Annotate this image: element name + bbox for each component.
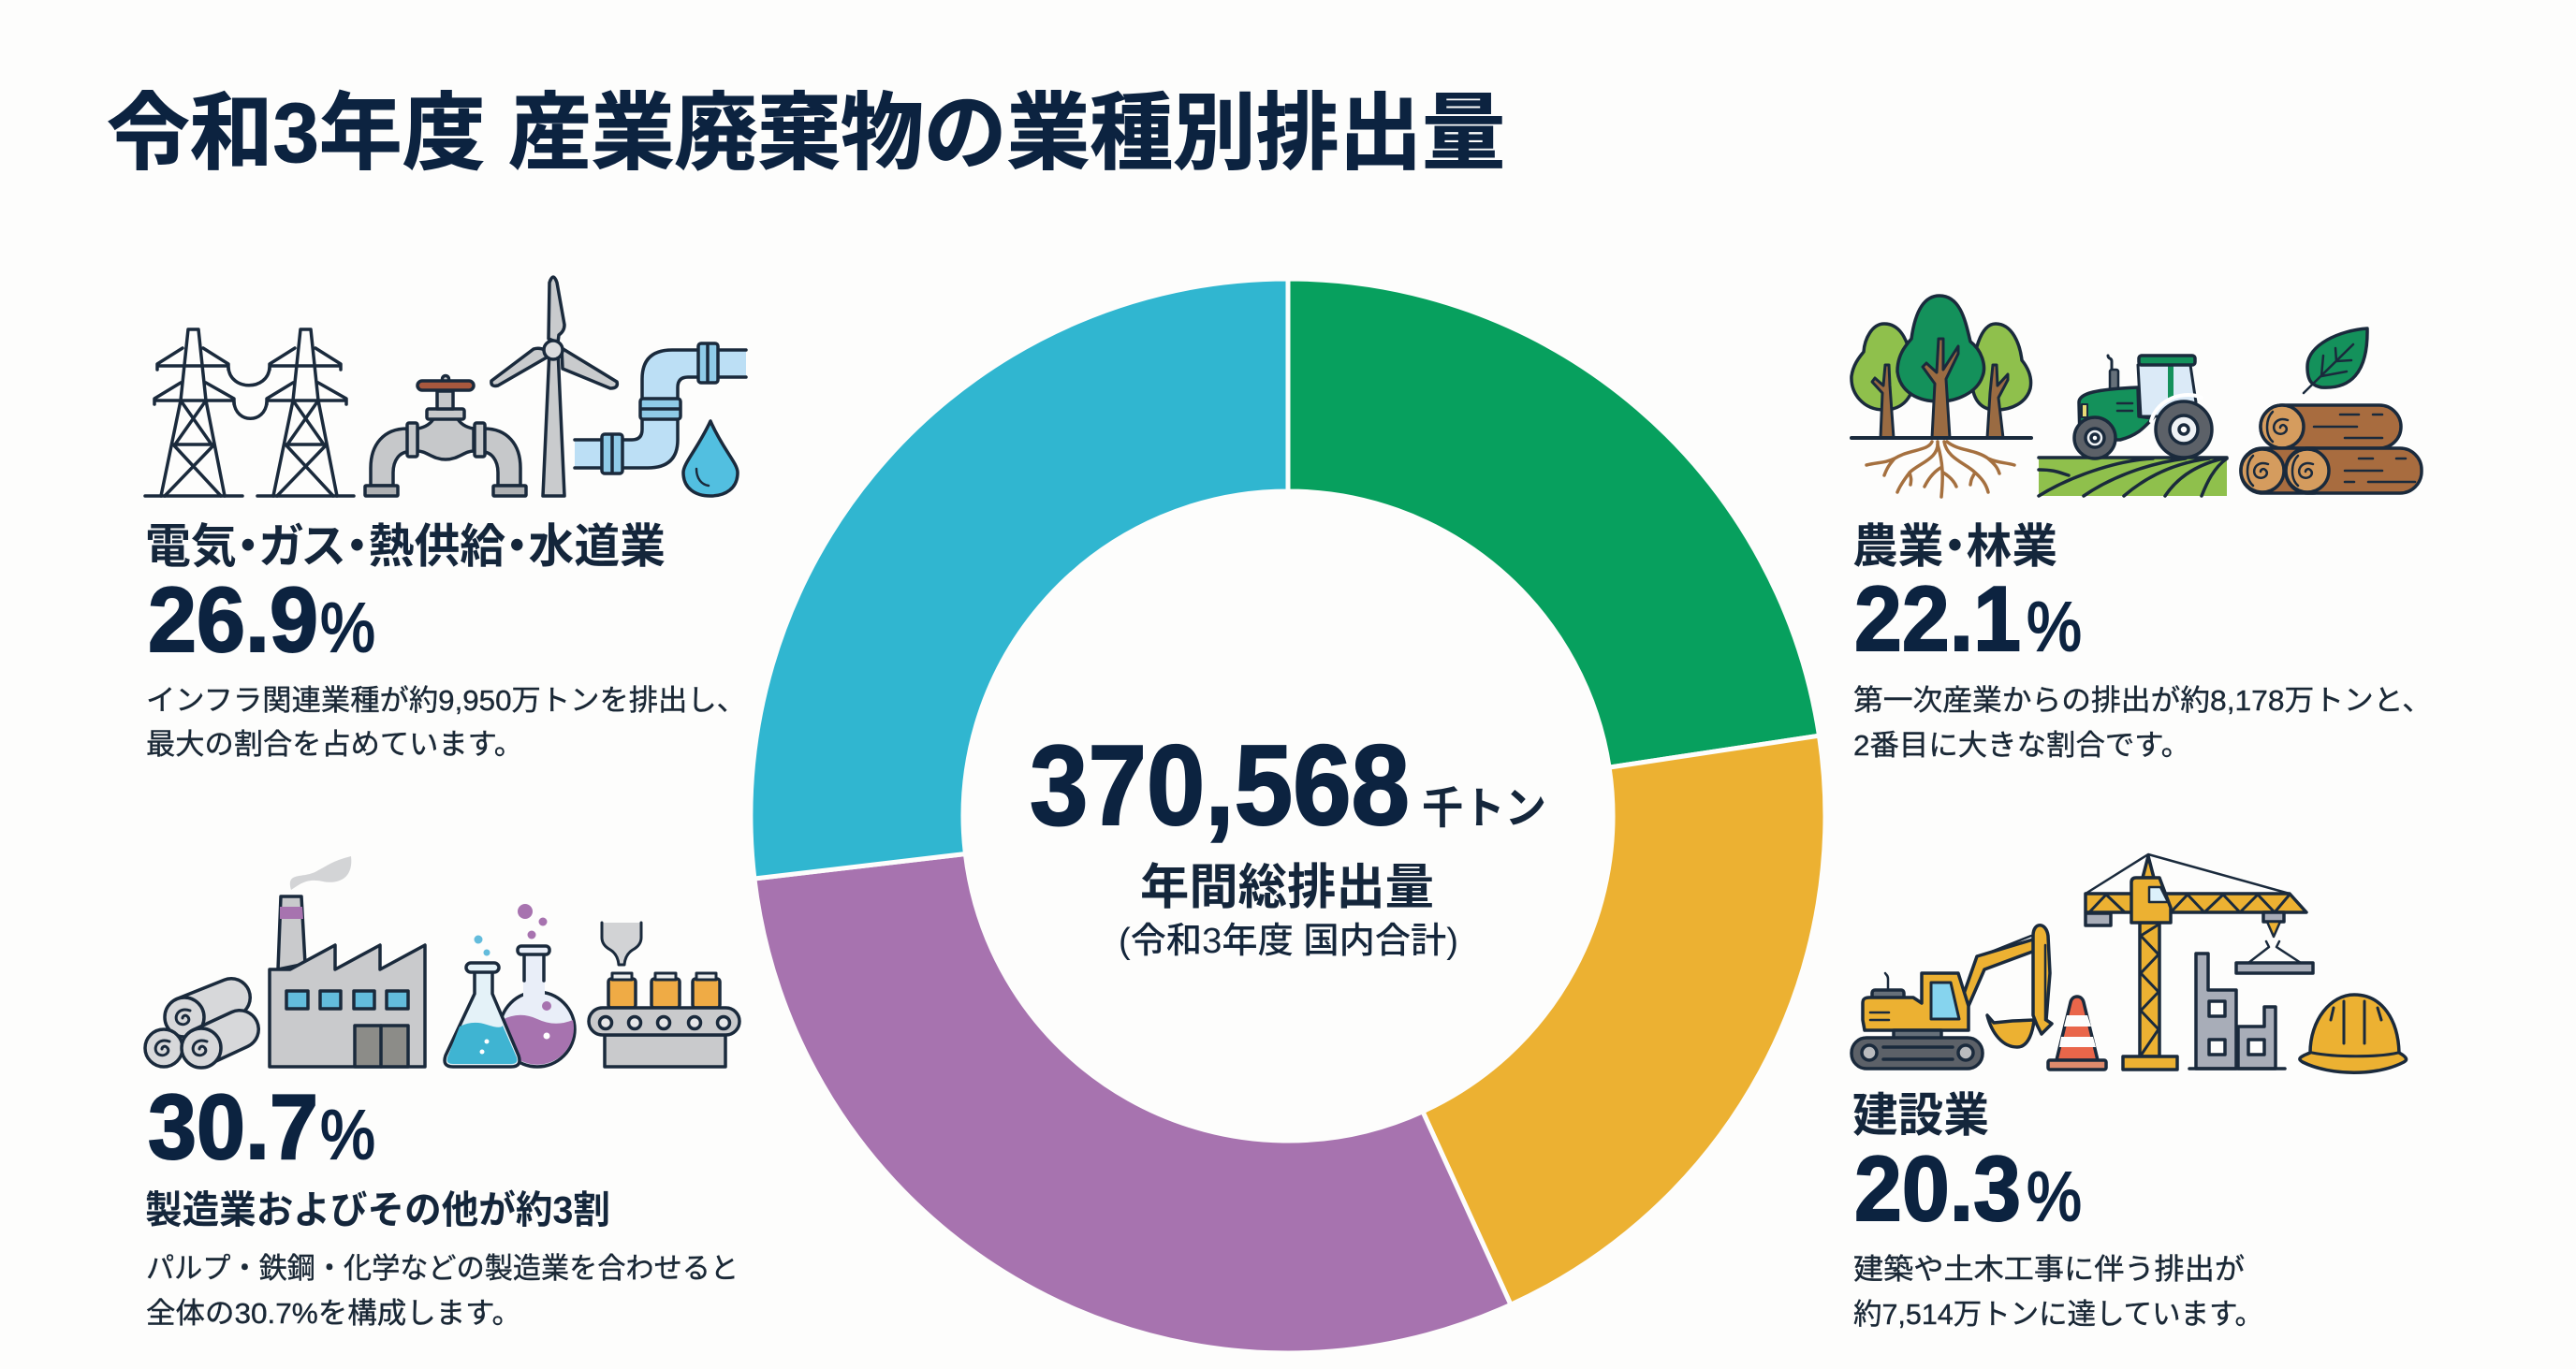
centre note: (令和3年度 国内合計) [1119, 922, 1458, 961]
icon: logs and leaf [2241, 328, 2422, 493]
description: 建築や土木工事に伴う排出が [1853, 1253, 2245, 1286]
icon: conveyor line [589, 923, 739, 1067]
icon: excavator [1852, 925, 2052, 1069]
title: 令和3年度 産業廃棄物の業種別排出量 [107, 87, 1505, 181]
description [146, 1252, 739, 1330]
segment: agriculture and forestry 22.1% [1288, 279, 1820, 767]
icon: hard hat [2300, 995, 2407, 1072]
icon: paper rolls [145, 998, 240, 1068]
icon: traffic cone [2048, 997, 2106, 1070]
heading: 建設業 [1852, 1089, 1989, 1142]
icon: water pipe [575, 343, 746, 473]
percentage: % [2027, 588, 2082, 665]
description [1853, 1253, 2263, 1331]
icon: utilities illustration [145, 277, 746, 496]
description: 最大の割合を占めています。 [146, 728, 523, 761]
heading: 製造業およびその他が約3割 [145, 1188, 610, 1231]
panel: construction [1852, 854, 2407, 1331]
panel: agriculture and forestry [1852, 296, 2432, 762]
icon: tower crane [2086, 854, 2313, 1070]
unit: 千トン [1422, 783, 1546, 833]
donut centre label [1030, 721, 1546, 961]
icon: manufacturing illustration [145, 856, 739, 1068]
icon: agriculture illustration [1852, 296, 2422, 497]
icon: trees [1852, 296, 2031, 497]
description: 2番目に大きな割合です。 [1853, 729, 2190, 762]
percentage: % [320, 1096, 375, 1173]
percentage: 30.7 [148, 1075, 318, 1178]
segment: manufacturing 30.7% [754, 853, 1511, 1353]
description: 全体の30.7%を構成します。 [146, 1297, 521, 1330]
description [146, 684, 746, 761]
description: 約7,514万トンに達しています。 [1853, 1298, 2263, 1331]
icon: wind turbine [491, 277, 617, 496]
description: インフラ関連業種が約9,950万トンを排出し、 [146, 684, 746, 717]
icon: water drop [683, 421, 738, 496]
centre caption: 年間総排出量 [1140, 861, 1434, 915]
segment: construction 20.3% [1423, 735, 1825, 1304]
icon: building under construction [2189, 954, 2285, 1069]
percentage: 26.9 [148, 568, 318, 671]
description [1853, 684, 2432, 762]
donut chart [751, 279, 1825, 1353]
segment: utilities 26.9% [751, 279, 1288, 879]
description: 第一次産業からの排出が約8,178万トンと、 [1853, 684, 2432, 717]
icon: valve [365, 376, 526, 496]
icon: tractor on field [2039, 356, 2227, 496]
icon: factory [270, 856, 425, 1067]
description: パルプ・鉄鋼・化学などの製造業を合わせると [146, 1252, 739, 1285]
heading: 農業・林業 [1852, 520, 2057, 573]
icon: chemistry flasks [445, 904, 575, 1067]
percentage: 22.1 [1854, 567, 2021, 670]
heading: 電気・ガス・熱供給・水道業 [145, 520, 666, 573]
total value: 370,568 [1030, 721, 1410, 849]
percentage: % [2027, 1158, 2082, 1235]
panel: manufacturing [145, 856, 739, 1330]
panel: utilities [145, 277, 746, 761]
icon: construction illustration [1852, 854, 2407, 1072]
icon: transmission towers [145, 329, 354, 496]
percentage: % [320, 589, 375, 666]
percentage: 20.3 [1854, 1137, 2021, 1240]
